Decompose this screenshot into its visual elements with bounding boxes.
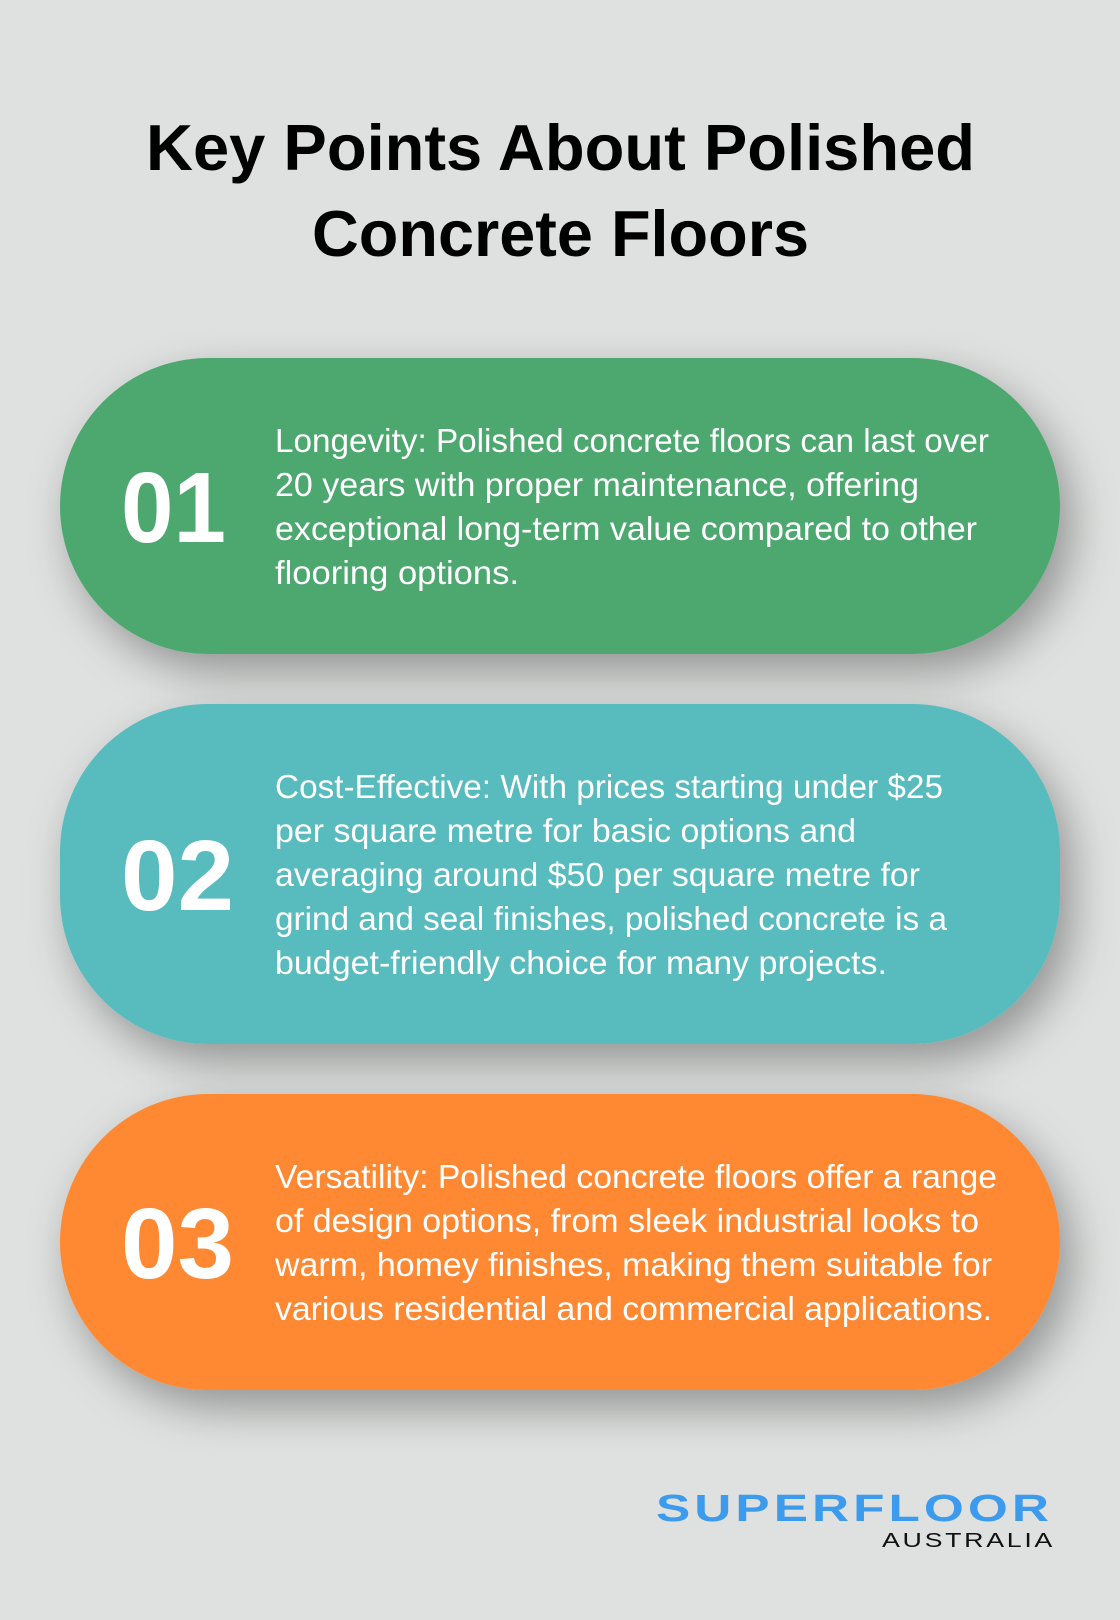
number 01: 01: [121, 452, 226, 564]
text: longevity: Longevity: Polished concrete floors can last over: [275, 422, 989, 459]
pill: green: [60, 358, 1060, 654]
text: cost-effective: Cost-Effective: With prices starting under $25: [275, 768, 943, 805]
text: cost-effective: budget-friendly choice for many projects.: [275, 944, 887, 981]
text: versatility: warm, homey finishes, making them suitable for: [274, 1246, 992, 1283]
text: longevity: [275, 422, 989, 591]
panel: longevity: [60, 358, 1060, 654]
text: cost-effective: per square metre for basic options and: [275, 812, 856, 849]
pill: orange: [60, 1094, 1060, 1390]
title: [146, 111, 975, 270]
number 02: 02: [121, 820, 234, 932]
title: Key Points About Polished: [146, 111, 975, 184]
pill: teal: [60, 704, 1060, 1044]
text: versatility: Versatility: Polished concrete floors offer a range: [275, 1158, 997, 1195]
text: versatility: of design options, from sleek industrial looks to: [275, 1202, 979, 1239]
text: cost-effective: [275, 768, 948, 981]
logo: Superfloor Australia: [656, 1488, 1055, 1552]
text: longevity: flooring options.: [275, 554, 519, 591]
text: cost-effective: grind and seal finishes, polished concrete is a: [275, 900, 948, 937]
text: versatility: various residential and commercial applications.: [275, 1290, 992, 1327]
text: longevity: exceptional long-term value compared to other: [275, 510, 977, 547]
text: versatility: [274, 1158, 997, 1327]
logo: Superfloor Australia: SUPERFLOOR: [656, 1488, 1053, 1530]
title: Concrete Floors: [312, 197, 809, 270]
number 03: 03: [121, 1188, 234, 1300]
panel: cost-effective: [60, 704, 1060, 1044]
text: longevity: 20 years with proper maintenance, offering: [275, 466, 919, 503]
logo: Superfloor Australia: AUSTRALIA: [882, 1530, 1055, 1552]
text: cost-effective: averaging around $50 per square metre for: [275, 856, 920, 893]
panel: versatility: [60, 1094, 1060, 1390]
